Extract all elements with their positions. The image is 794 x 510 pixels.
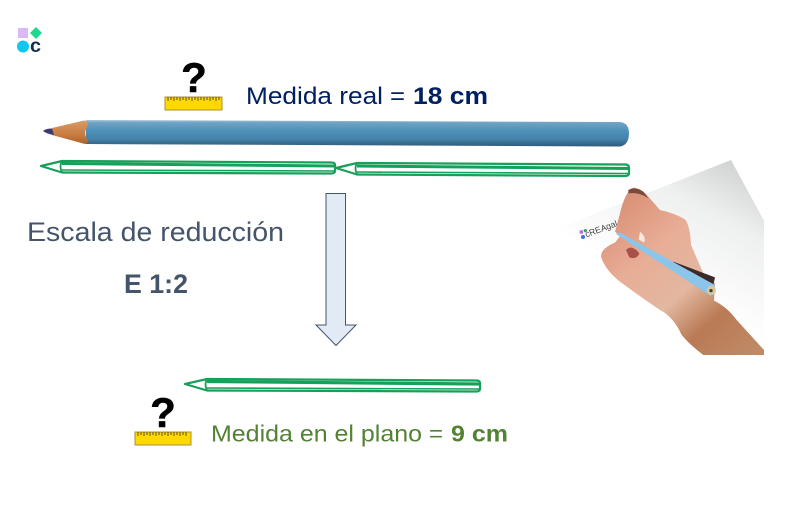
heading: plan measure: 9 cm: [451, 420, 508, 446]
icon: ruler with question mark (top): ?: [181, 54, 207, 101]
heading: plan measure: [211, 420, 508, 446]
paper sheet: [555, 160, 764, 355]
paper brand text: cREAgal: [584, 218, 619, 239]
heading: plan measure: =: [429, 420, 443, 446]
pencil in hand: [616, 233, 715, 296]
heading: plan measure: Medida en el plano: [211, 420, 422, 446]
heading: real measure: 18 cm: [413, 83, 488, 110]
heading: real measure: [246, 83, 488, 110]
scale value: E 1:2: [124, 269, 188, 299]
green outline pencil: right half: [336, 163, 629, 176]
logo: c: [30, 36, 41, 57]
green outline pencil: plan size: [185, 379, 480, 392]
icon: ruler with question mark (bottom): ?: [150, 389, 176, 436]
heading: real measure: =: [390, 83, 405, 110]
icon: ruler with question mark (top): [165, 54, 222, 110]
icon: ruler with question mark (bottom): [135, 389, 191, 445]
heading: reduction scale: Escala de reducción: [27, 217, 284, 247]
real pencil: [43, 120, 629, 146]
heading: real measure: Medida real: [246, 83, 383, 110]
arrow: down: [316, 194, 356, 346]
hand: [601, 188, 764, 355]
green outline pencil: left half: [41, 161, 335, 174]
photo: hand drawing with pencil on paper: [555, 160, 764, 355]
logo: [17, 27, 42, 57]
